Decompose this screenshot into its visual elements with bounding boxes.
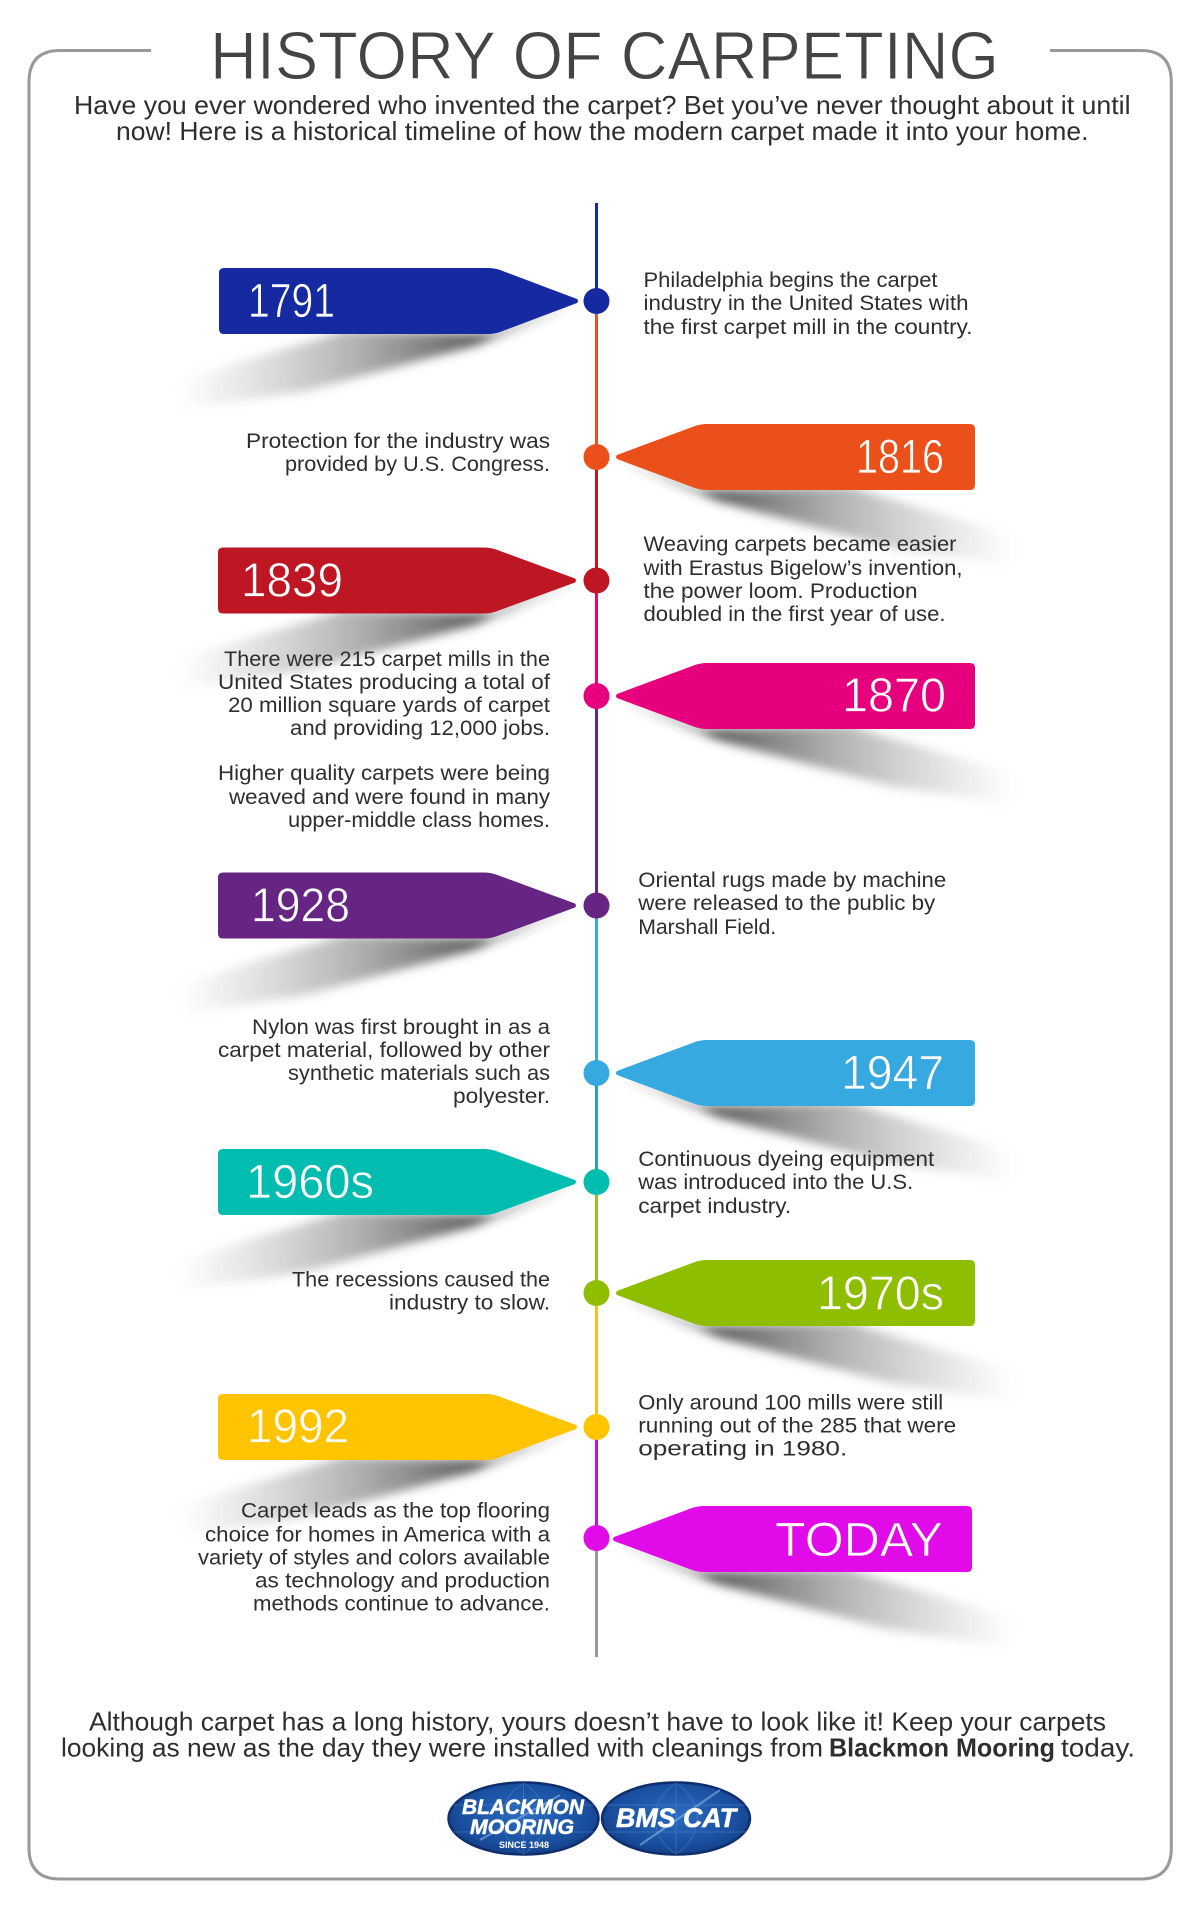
event 1839 text: with Erastus Bigelow’s invention, <box>642 557 962 580</box>
event 1928 text: Oriental rugs made by machine <box>638 869 946 892</box>
event 1970s marker <box>584 1260 1020 1401</box>
closing text <box>61 1706 1135 1762</box>
event today text: variety of styles and colors available <box>198 1546 550 1570</box>
event 1870 text: and providing 12,000 jobs. <box>290 717 550 740</box>
higher quality carpets text <box>218 762 551 832</box>
logo: Blackmon Mooring: MOORING <box>470 1816 574 1839</box>
event 1992 marker <box>173 1394 610 1535</box>
event today marker <box>584 1506 1017 1647</box>
event 1970s text: industry to slow. <box>389 1292 550 1314</box>
event 1970s text <box>292 1268 550 1314</box>
event 1947 text: synthetic materials such as <box>288 1062 550 1085</box>
event 1992 text: Only around 100 mills were still <box>638 1392 943 1414</box>
event 1928 marker: 1928 <box>251 880 350 932</box>
logo: Blackmon Mooring: BLACKMON <box>462 1796 585 1819</box>
intro text <box>74 90 1130 146</box>
event 1970s text: The recessions caused the <box>292 1268 550 1292</box>
event 1870 text <box>218 648 550 740</box>
event 1839 text: doubled in the first year of use. <box>644 603 946 626</box>
event today text: methods continue to advance. <box>253 1592 550 1616</box>
event today marker: TODAY <box>775 1514 943 1567</box>
event 1992 text: operating in 1980. <box>638 1438 847 1460</box>
higher quality carpets text: upper-middle class homes. <box>288 809 550 832</box>
higher quality carpets text: Higher quality carpets were being <box>218 762 550 785</box>
event 1839 marker <box>173 548 610 688</box>
event 1791 text: the first carpet mill in the country. <box>644 316 972 339</box>
event 1928 text: Marshall Field. <box>638 916 776 939</box>
event 1992 text: running out of the 285 that were <box>638 1414 956 1438</box>
event 1960s marker: 1960s <box>246 1156 374 1209</box>
event 1791 text <box>644 269 972 339</box>
event 1947 text: polyester. <box>453 1085 550 1108</box>
closing text: looking as new as the day they were installed with cleanings from <box>61 1732 823 1762</box>
event 1839 marker: 1839 <box>241 554 343 608</box>
event today text: Carpet leads as the top flooring <box>241 1500 550 1522</box>
event 1816 marker: 1816 <box>856 431 944 484</box>
event 1870 text: 20 million square yards of carpet <box>228 694 550 717</box>
event 1947 text <box>218 1016 550 1108</box>
closing text: Although carpet has a long history, yours doesn’t have to look like it! Keep your carpets <box>89 1706 1106 1736</box>
event 1947 text: carpet material, followed by other <box>218 1039 550 1062</box>
event 1947 marker: 1947 <box>841 1047 944 1100</box>
event today text <box>198 1500 550 1616</box>
event 1928 text: were released to the public by <box>637 892 936 915</box>
event 1960s marker <box>173 1149 610 1290</box>
event 1816 text <box>246 430 550 476</box>
logo: Blackmon Mooring <box>448 1782 598 1854</box>
event 1960s text: carpet industry. <box>638 1195 791 1218</box>
event 1870 text: There were 215 carpet mills in the <box>224 648 550 671</box>
closing text: Blackmon Mooring <box>829 1732 1055 1762</box>
intro text: Have you ever wondered who invented the carpet? Bet you’ve never thought about it until <box>74 90 1130 120</box>
event 1947 text: Nylon was first brought in as a <box>252 1016 550 1039</box>
event 1960s text: Continuous dyeing equipment <box>638 1148 934 1171</box>
event 1992 text <box>638 1392 956 1460</box>
logo: Blackmon Mooring: SINCE 1948 <box>499 1840 549 1850</box>
event 1839 text: Weaving carpets became easier <box>644 533 956 556</box>
event 1947 marker <box>584 1040 1020 1181</box>
event 1928 text <box>637 869 946 939</box>
event 1816 marker <box>584 424 1020 565</box>
title: HISTORY OF CARPETING <box>210 18 999 94</box>
event 1992 marker: 1992 <box>247 1400 349 1454</box>
event 1970s marker: 1970s <box>817 1268 944 1320</box>
event 1960s text: was introduced into the U.S. <box>637 1171 913 1194</box>
event 1816 text: provided by U.S. Congress. <box>285 453 550 476</box>
event 1960s text <box>637 1148 934 1218</box>
intro text: now! Here is a historical timeline of how the modern carpet made it into your home. <box>116 116 1088 146</box>
closing text: today. <box>1061 1732 1135 1762</box>
event 1870 text: United States producing a total of <box>218 671 550 694</box>
event 1839 text <box>642 533 962 626</box>
event 1928 marker <box>173 872 610 1014</box>
event today text: as technology and production <box>255 1570 550 1592</box>
event 1791 marker: 1791 <box>248 275 335 328</box>
logo: BMS CAT <box>602 1782 750 1854</box>
event 1791 text: Philadelphia begins the carpet <box>644 269 938 292</box>
event 1839 text: the power loom. Production <box>644 580 918 603</box>
logo: BMS CAT: BMS CAT <box>616 1803 738 1833</box>
event today text: choice for homes in America with a <box>205 1524 550 1546</box>
higher quality carpets text: weaved and were found in many <box>228 786 551 809</box>
timeline axis <box>595 203 598 1657</box>
event 1870 marker <box>584 663 1020 804</box>
event 1870 marker: 1870 <box>842 670 946 722</box>
event 1816 text: Protection for the industry was <box>246 430 550 453</box>
event 1791 marker <box>175 268 610 409</box>
event 1791 text: industry in the United States with <box>644 292 968 315</box>
